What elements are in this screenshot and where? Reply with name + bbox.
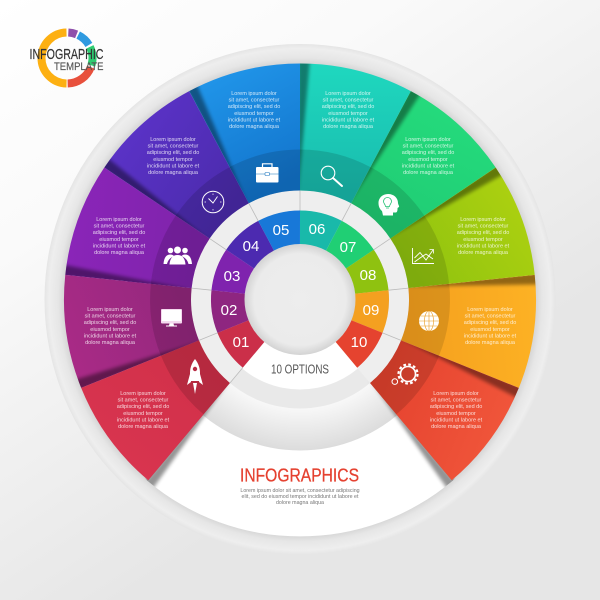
- panel: option 04: adipiscing elit, sed do: [147, 150, 199, 156]
- panel: option 07: adipiscing elit, sed do: [402, 150, 454, 156]
- panel: option 07: dolore magna aliqua: [403, 170, 454, 176]
- text block: infographics description: elit, sed do eiusmod tempor incididunt ut labore et: [242, 494, 359, 500]
- panel: option 05: 05: [273, 222, 289, 239]
- panel: option 05: adipiscing elit, sed do: [228, 104, 280, 110]
- panel: option 05: incididunt ut labore et: [228, 117, 281, 123]
- icon: clock: [202, 191, 224, 213]
- panel: option 02: [36, 215, 256, 391]
- logo: infographic template: TEMPLATE: [54, 61, 104, 73]
- panel: option 08: 08: [360, 267, 376, 284]
- panel: option 03: dolore magna aliqua: [94, 250, 145, 256]
- panel: option 01: Lorem ipsum dolor: [120, 391, 166, 397]
- panel: option 05: Lorem ipsum dolor: [231, 91, 277, 97]
- panel: option 05: dolore magna aliqua: [229, 124, 280, 130]
- icon: globe: [419, 311, 439, 331]
- panel: option 06: dolore magna aliqua: [323, 124, 374, 130]
- panel: option 02: dolore magna aliqua: [85, 340, 136, 346]
- panel: option 03: Lorem ipsum dolor: [96, 217, 142, 223]
- logo: infographic template: [30, 24, 104, 92]
- panel: option 07: incididunt ut labore et: [402, 163, 455, 169]
- panel: option 03: incididunt ut labore et: [93, 243, 146, 249]
- panel: option 10: eiusmod tempor: [436, 411, 476, 417]
- panel: option 03: eiusmod tempor: [99, 237, 139, 243]
- panel: option 09: 09: [363, 302, 379, 319]
- panel: option 08: sit amet, consectetur: [458, 224, 509, 230]
- panel: option 01: incididunt ut labore et: [117, 417, 170, 423]
- panel: option 10: [304, 316, 523, 492]
- panel: option 10: sit amet, consectetur: [431, 398, 482, 404]
- panel: option 06: sit amet, consectetur: [323, 98, 374, 104]
- panel: option 07: [321, 87, 511, 309]
- panel: option 06: 06: [309, 221, 325, 238]
- panel: option 10: dolore magna aliqua: [431, 424, 482, 430]
- light ring between inner and outer wedges: [191, 190, 409, 383]
- icon: people: [164, 246, 192, 264]
- label: 10 options: 10 OPTIONS: [271, 362, 329, 376]
- panel: option 04: Lorem ipsum dolor: [150, 137, 196, 143]
- panel: option 01: adipiscing elit, sed do: [117, 404, 169, 410]
- text block: infographics description: [240, 488, 360, 506]
- panel: option 03: [61, 164, 263, 296]
- panel: option 05: [186, 36, 375, 258]
- icon: monitor: [161, 309, 182, 326]
- panel: option 07: 07: [340, 239, 356, 256]
- panel: option 01: dolore magna aliqua: [118, 424, 169, 430]
- panel: option 04: 04: [243, 238, 259, 255]
- panel: option 09: sit amet, consectetur: [465, 314, 516, 320]
- panel: option 04: [100, 73, 322, 274]
- panel: option 02: Lorem ipsum dolor: [87, 307, 133, 313]
- panel: option 01: [63, 266, 269, 480]
- panel: option 01: 01: [233, 334, 249, 351]
- panel: option 07: eiusmod tempor: [408, 157, 448, 163]
- heading: infographics: INFOGRAPHICS: [240, 466, 359, 486]
- panel: option 05: sit amet, consectetur: [229, 98, 280, 104]
- panel: option 06: Lorem ipsum dolor: [325, 91, 371, 97]
- text block: infographics description: Lorem ipsum dolor sit amet, consectetur adipiscing: [240, 488, 360, 494]
- panel: option 03: sit amet, consectetur: [94, 224, 145, 230]
- panel: option 09: adipiscing elit, sed do: [464, 320, 516, 326]
- panel: option 01: eiusmod tempor: [123, 411, 163, 417]
- panel: option 02: adipiscing elit, sed do: [84, 320, 136, 326]
- panel: option 07: sit amet, consectetur: [403, 144, 454, 150]
- panel: option 06: adipiscing elit, sed do: [322, 104, 374, 110]
- panel: option 09: dolore magna aliqua: [465, 340, 516, 346]
- panel: option 04: dolore magna aliqua: [148, 170, 199, 176]
- panel: option 02: eiusmod tempor: [90, 327, 130, 333]
- logo: infographic template: INFOGRAPHIC: [30, 47, 104, 63]
- icon: rocket: [187, 359, 203, 394]
- icon: gears: [392, 364, 418, 384]
- panel: option 01: sit amet, consectetur: [118, 398, 169, 404]
- panel: option 07: Lorem ipsum dolor: [405, 137, 451, 143]
- icon: magnifier: [321, 166, 342, 186]
- icon: head with lightbulb: [378, 194, 399, 216]
- panel: option 10: adipiscing elit, sed do: [430, 404, 482, 410]
- panel: option 08: Lorem ipsum dolor: [460, 217, 506, 223]
- panel: option 04: sit amet, consectetur: [148, 144, 199, 150]
- icon: line chart: [412, 248, 434, 264]
- panel: option 06: [298, 60, 411, 251]
- text block: infographics description: dolore magna aliqua: [276, 500, 324, 506]
- panel: option 06: incididunt ut labore et: [322, 117, 375, 123]
- panel: option 08: incididunt ut labore et: [457, 243, 510, 249]
- panel: option 10: incididunt ut labore et: [430, 417, 483, 423]
- panel: option 06: eiusmod tempor: [328, 111, 368, 117]
- panel: option 08: [339, 164, 561, 364]
- panel: option 03: 03: [224, 268, 240, 285]
- panel: option 02: sit amet, consectetur: [85, 314, 136, 320]
- panel: option 05: eiusmod tempor: [234, 111, 274, 117]
- panel: option 09: [348, 272, 550, 405]
- panel: option 08: eiusmod tempor: [463, 237, 503, 243]
- panel: option 09: Lorem ipsum dolor: [467, 307, 513, 313]
- panel: white bottom sector: [144, 342, 456, 536]
- panel: option 02: incididunt ut labore et: [84, 333, 137, 339]
- panel: option 09: eiusmod tempor: [470, 327, 510, 333]
- panel: option 04: eiusmod tempor: [153, 157, 193, 163]
- icon: briefcase: [256, 164, 278, 182]
- panel: option 02: 02: [221, 302, 237, 319]
- panel: option 09: incididunt ut labore et: [464, 333, 517, 339]
- panel: option 10: Lorem ipsum dolor: [433, 391, 479, 397]
- center hub circle: [244, 244, 356, 355]
- panel: option 04: incididunt ut labore et: [147, 163, 200, 169]
- panel: option 08: adipiscing elit, sed do: [457, 230, 509, 236]
- panel: option 08: dolore magna aliqua: [458, 250, 509, 256]
- panel: option 03: adipiscing elit, sed do: [93, 230, 145, 236]
- outer grey disk: [44, 44, 556, 555]
- panel: option 10: 10: [351, 334, 367, 351]
